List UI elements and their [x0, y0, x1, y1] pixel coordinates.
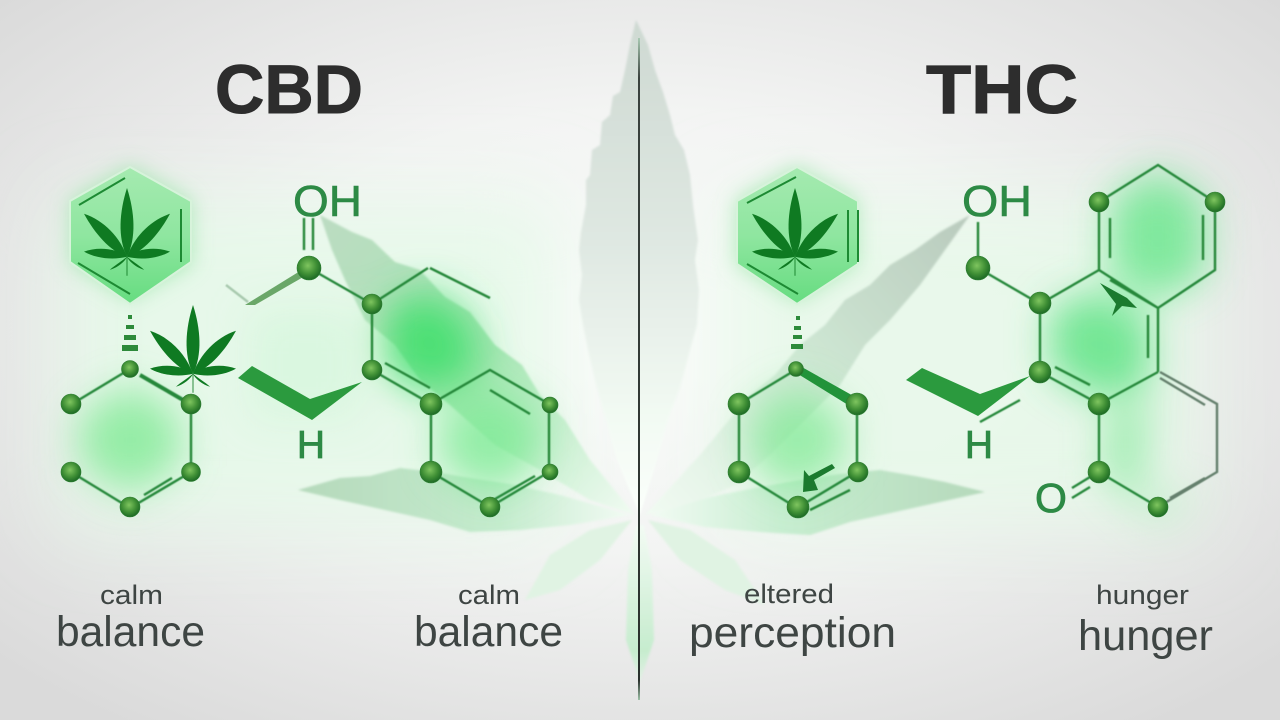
label: calm balance 2: balance	[414, 608, 563, 656]
label: hunger: hunger	[1096, 580, 1189, 610]
hexagon with leaf	[70, 167, 191, 304]
atom label: H	[297, 424, 325, 467]
stereo dashes	[122, 315, 138, 351]
label: calm balance 2: calm	[458, 580, 520, 610]
atom label: O	[1035, 475, 1067, 521]
arrow mark	[1100, 283, 1137, 316]
icon: cannabis leaf	[752, 188, 838, 276]
bonds	[739, 165, 1217, 510]
atom label: H	[965, 424, 993, 467]
panel: THC molecule	[728, 165, 1225, 525]
atom label: OH	[293, 177, 362, 226]
hexagon with leaf	[737, 167, 858, 304]
divider line	[638, 38, 640, 700]
pale haze behind molecules	[60, 200, 1200, 530]
label: calm balance 2	[414, 580, 563, 656]
label: hunger: hunger	[1078, 612, 1213, 660]
label: hunger	[1078, 580, 1213, 660]
arrow mark	[803, 464, 835, 492]
stereo dashes	[791, 316, 803, 349]
label: altered perception: perception	[689, 609, 896, 657]
green glows	[80, 290, 540, 495]
label: calm balance 1: calm	[100, 580, 163, 610]
atoms	[728, 192, 1225, 518]
label: calm balance 1: balance	[56, 608, 205, 656]
wedge bonds	[798, 366, 857, 408]
label: altered perception	[689, 579, 896, 657]
cannabis leaf watermark	[298, 20, 985, 682]
bonds	[71, 218, 549, 508]
icon: cannabis leaf	[84, 188, 170, 276]
atom label: OH	[962, 177, 1032, 226]
label: calm balance 1	[56, 580, 205, 656]
panel: CBD molecule	[61, 165, 558, 517]
heading: THC: THC	[926, 51, 1078, 128]
label: altered perception: eltered	[744, 579, 834, 609]
atoms	[61, 256, 558, 517]
icon: cannabis leaf	[150, 305, 236, 393]
heading: CBD: CBD	[215, 51, 363, 128]
wedge bonds	[238, 366, 362, 420]
green glows	[750, 170, 1205, 525]
